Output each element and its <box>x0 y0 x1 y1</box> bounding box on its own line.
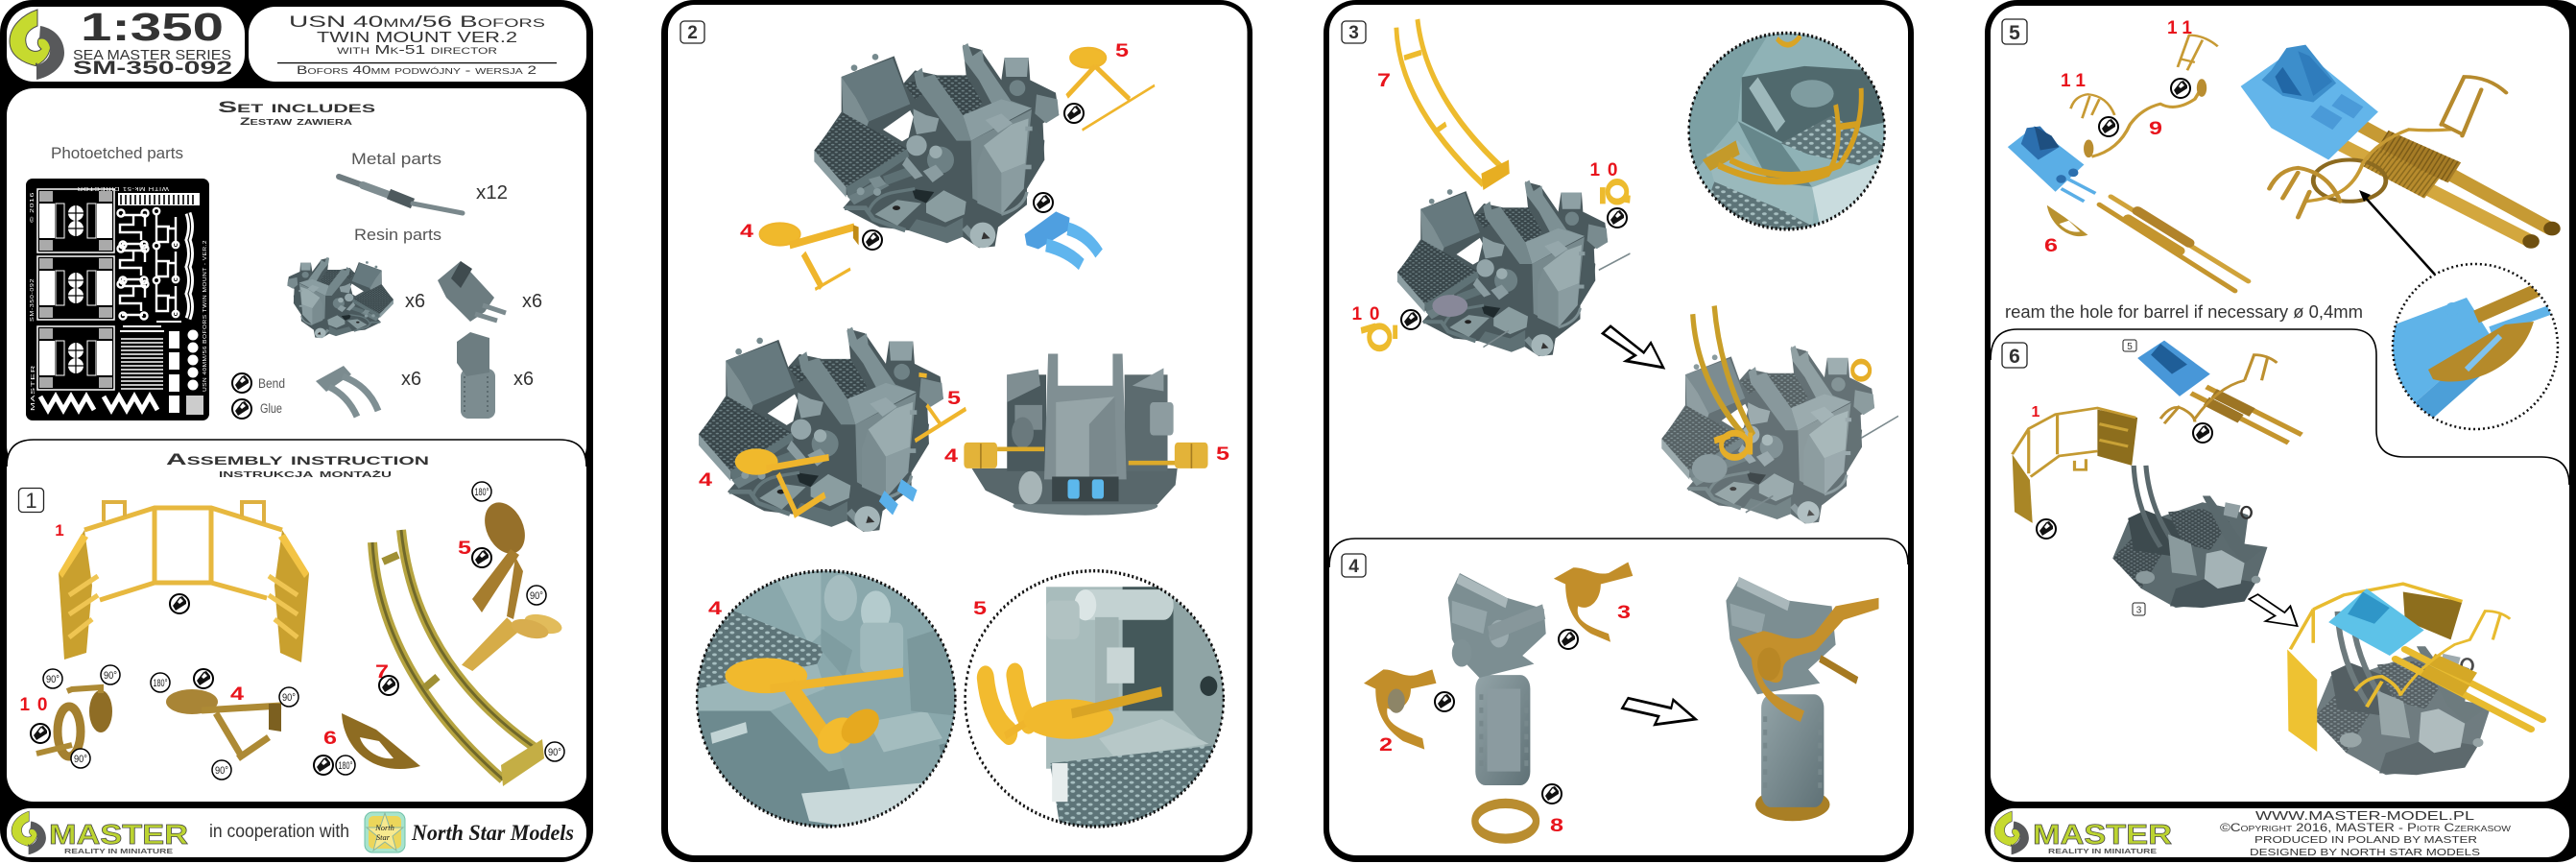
label 7: 7 <box>375 662 389 683</box>
label 3: 3 <box>1617 603 1631 623</box>
badge 90 <box>279 687 298 707</box>
part 5 <box>465 496 564 668</box>
tagline: REALITY IN MINIATURE <box>64 847 173 855</box>
Polish title: Bofors 40mm podwójny - wersja 2 <box>297 65 537 77</box>
part 3 <box>1554 562 1633 642</box>
director column assembled <box>1726 578 1879 821</box>
panel: steps 3 and 4 <box>1324 0 1914 862</box>
step 1 box: 1 <box>25 489 37 513</box>
footer: credits <box>1991 808 2569 858</box>
Master wordmark: MASTER <box>49 820 188 851</box>
part 11 <box>2178 36 2218 70</box>
gun subassembly <box>2137 341 2302 443</box>
badge 180: 180° <box>154 678 167 689</box>
step 6 box <box>2002 343 2027 368</box>
label 10: 10 <box>1589 160 1618 180</box>
twin barrels <box>2099 197 2249 291</box>
fret lettering: USN 40MM/56 BOFORS TWIN MOUNT - VER.2 <box>203 240 208 392</box>
fret lettering: MASTER <box>31 365 36 411</box>
part 10 left <box>1361 325 1395 348</box>
part 2 <box>1364 669 1436 750</box>
icon glue <box>379 676 398 695</box>
label 4: 4 <box>708 599 723 619</box>
badge 90 <box>101 665 120 684</box>
resin column <box>457 332 495 419</box>
badge 180: 180° <box>338 760 353 772</box>
step 2 box <box>680 21 704 43</box>
badge 90 <box>43 669 62 688</box>
arrow <box>1603 326 1663 368</box>
icon: Master logo <box>1994 811 2029 854</box>
arrow to hole <box>2359 190 2435 275</box>
badge 90: 90° <box>104 670 117 682</box>
badge 90: 90° <box>215 765 228 777</box>
part 6 <box>342 713 420 769</box>
label 5: 5 <box>1216 444 1230 465</box>
label 5: 5 <box>973 599 988 619</box>
scale title: 1:350 <box>81 5 224 49</box>
mini step 5 box: 5 <box>2127 342 2133 352</box>
label: photoetched parts: Photoetched parts <box>51 144 183 162</box>
label bend: Bend <box>258 376 285 391</box>
x12: x12 <box>476 182 508 204</box>
icon: Master logo <box>12 811 46 854</box>
header: product title <box>249 7 586 82</box>
part 5 gold <box>1067 48 1155 130</box>
label: metal parts: Metal parts <box>351 150 441 168</box>
icon: glue <box>232 399 251 419</box>
fret lettering: © 2016 <box>29 192 36 223</box>
icon glue <box>170 594 189 613</box>
series name: SEA MASTER SERIES <box>73 48 231 63</box>
part 8 ring <box>1475 804 1537 839</box>
badge 90 <box>71 749 90 768</box>
label: resin parts: Resin parts <box>354 226 441 244</box>
title line 1: USN 40mm/56 Bofors <box>289 12 545 31</box>
icon: bend <box>232 373 251 393</box>
fret lettering: SM-350-092 <box>30 278 36 322</box>
label 4: 4 <box>699 470 713 491</box>
part 11 <box>2071 94 2114 118</box>
badge 90: 90° <box>530 590 543 602</box>
ream note: ream the hole for barrel if necessary ø 0,4mm <box>2005 301 2363 322</box>
small blue breech <box>2008 127 2095 202</box>
label 4: 4 <box>230 684 245 705</box>
icon glue <box>472 548 491 567</box>
part 7 gold rails <box>1396 19 1510 190</box>
turret: exploded view <box>814 43 1059 248</box>
badge 90 <box>527 586 546 605</box>
badge 180: 180° <box>474 487 489 498</box>
x6 column: x6 <box>513 369 534 390</box>
resin twin tubes <box>316 366 378 417</box>
panel: steps 5 and 6 <box>1985 0 2576 862</box>
icon glue <box>863 230 882 250</box>
section: set includes <box>7 88 586 472</box>
label 11: 11 <box>2061 71 2086 91</box>
badge 90: 90° <box>548 747 561 758</box>
title line 3: with Mk-51 director <box>337 42 498 57</box>
fret lettering: WITH Mk-51 DIRECTOR <box>77 185 169 191</box>
header: scale and series <box>7 5 245 82</box>
icon glue <box>1435 692 1454 711</box>
North Star badge <box>365 812 405 852</box>
label 9: 9 <box>2149 119 2162 139</box>
icon glue <box>1064 104 1084 123</box>
fret lettering <box>29 185 208 411</box>
icon glue <box>2171 79 2190 98</box>
section: assembly instruction <box>7 440 586 802</box>
title line 2: TWIN MOUNT VER.2 <box>317 30 517 46</box>
badge 180 <box>151 673 170 692</box>
label 4: 4 <box>740 222 754 242</box>
label 5: 5 <box>1115 41 1130 61</box>
badge 90: 90° <box>282 692 296 704</box>
final assembled mount <box>2287 584 2542 775</box>
mini step 5 box <box>2123 340 2136 352</box>
label 6: 6 <box>2044 236 2058 256</box>
icon glue <box>2099 117 2118 136</box>
label 1: 1 <box>55 521 64 540</box>
resin gun block <box>438 261 506 322</box>
x6 turret: x6 <box>405 291 425 312</box>
label 2: 2 <box>1379 735 1393 756</box>
step 2 box: 2 <box>687 23 698 43</box>
large blue breech and barrels <box>2241 45 2561 249</box>
badge 90: 90° <box>74 754 87 765</box>
detail circle: rails <box>1687 31 1891 237</box>
part 10 right <box>1603 181 1630 204</box>
arrow <box>1622 698 1696 725</box>
label 7: 7 <box>1377 71 1391 91</box>
director column <box>1448 573 1546 785</box>
badge 90 <box>212 760 231 780</box>
step 4 box <box>1342 554 1366 577</box>
step 6 box: 6 <box>2009 346 2020 368</box>
subheading: instrukcja montażu <box>219 467 392 480</box>
detail circle: part 5 <box>966 571 1228 827</box>
x6 gun block: x6 <box>522 291 542 312</box>
label 10: 10 <box>19 695 48 715</box>
icon glue <box>1401 310 1420 329</box>
North Star badge: Star <box>376 832 391 842</box>
turret: step 3 start <box>1397 180 1630 356</box>
heading: Set includes <box>218 98 375 116</box>
icon glue <box>194 669 213 688</box>
turret: core <box>2112 466 2267 608</box>
metal barrel <box>339 177 463 213</box>
part 10 <box>36 687 112 756</box>
part 7 rails <box>372 530 544 786</box>
icon glue <box>1542 784 1562 804</box>
mini step 3 box: 3 <box>2136 605 2142 616</box>
copyright: ©Copyright 2016, MASTER - Piotr Czerkasow <box>2220 823 2512 834</box>
badge 90 <box>545 742 564 761</box>
badge 90: 90° <box>46 674 60 685</box>
heading: Assembly instruction <box>166 450 429 468</box>
icon glue <box>314 756 333 775</box>
turret: with parts 4 and 5 <box>699 327 966 532</box>
icon glue <box>2037 519 2056 539</box>
icon glue <box>2193 423 2212 443</box>
part 4 <box>166 689 281 758</box>
label 10: 10 <box>1351 304 1380 324</box>
step 4 box: 4 <box>1348 557 1359 577</box>
mini step 3 box <box>2133 603 2145 616</box>
part 1 fence <box>2013 408 2137 523</box>
icon glue <box>1608 208 1627 228</box>
label 5: 5 <box>947 389 962 409</box>
part 6 <box>2047 205 2087 236</box>
icon glue <box>31 724 50 743</box>
photoetched fret <box>26 179 209 420</box>
label 8: 8 <box>1550 816 1563 836</box>
resin turret <box>287 257 394 338</box>
detail circle: barrel hole <box>2390 264 2558 429</box>
label 11: 11 <box>2167 18 2192 38</box>
tagline: REALITY IN MINIATURE <box>2048 847 2157 855</box>
panel: parts sheet <box>0 0 593 862</box>
blue tube part <box>1025 211 1099 265</box>
x6 tubes: x6 <box>401 369 421 390</box>
step 3 box: 3 <box>1348 23 1359 43</box>
set code: SM-350-092 <box>73 59 232 79</box>
North Star badge: North <box>374 823 394 832</box>
step 5 box <box>2002 19 2027 44</box>
turret: front view <box>964 354 1208 516</box>
Master wordmark: MASTER <box>2033 820 2172 851</box>
cooperation text: in cooperation with <box>209 822 349 842</box>
panel: step 2 <box>661 0 1252 862</box>
footer: partners <box>7 808 586 857</box>
badge 180 <box>336 756 355 775</box>
label 4: 4 <box>944 446 959 467</box>
detail circle: part 4 <box>692 567 966 832</box>
arrow <box>2249 594 2298 626</box>
icon: Master logo <box>10 10 64 80</box>
part 9 <box>2084 79 2206 157</box>
website: WWW.MASTER-MODEL.PL <box>2255 808 2474 823</box>
step 1 box <box>19 488 44 513</box>
badge 180 <box>472 482 491 501</box>
step 5 box: 5 <box>2009 22 2020 44</box>
part 1 fence <box>59 502 309 662</box>
designed: DESIGNED BY NORTH STAR MODELS <box>2250 847 2480 858</box>
label glue: Glue <box>260 401 282 416</box>
subheading: Zestaw zawiera <box>240 116 352 128</box>
label 6: 6 <box>323 729 337 749</box>
step 3 box <box>1342 21 1366 43</box>
label 1: 1 <box>2032 404 2040 420</box>
part 4 gold <box>759 223 859 289</box>
icon glue <box>1559 630 1578 649</box>
label 5: 5 <box>458 539 472 559</box>
produced: PRODUCED IN POLAND BY MASTER <box>2254 834 2478 846</box>
North Star Models wordmark: North Star Models <box>411 821 574 845</box>
turret: step 3 result <box>1661 306 1898 523</box>
icon glue <box>1034 193 1053 212</box>
